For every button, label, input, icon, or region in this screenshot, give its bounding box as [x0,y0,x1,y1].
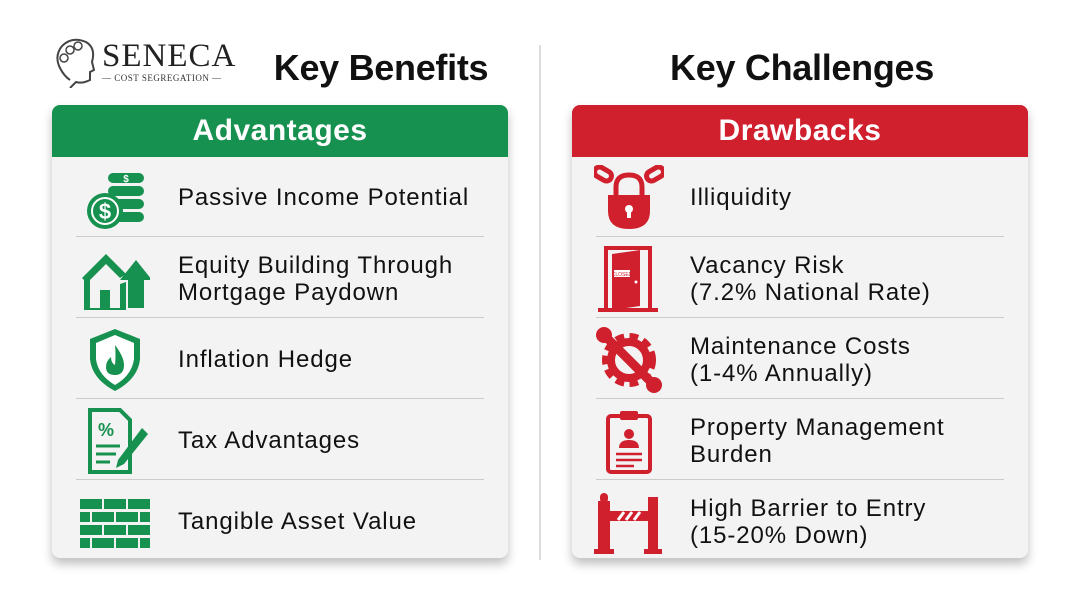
row: tax [88,408,360,474]
header: advantages: Advantages [192,114,368,147]
row: vacancy [598,246,931,312]
header: drawbacks: Drawbacks [719,114,881,147]
logo: — COST SEGREGATION — [102,73,222,83]
panel: advantages [52,105,508,558]
row: barrier [594,493,926,554]
row: illiquidity [594,165,792,229]
icon: house arrow [82,254,150,310]
icon: barrier gate [594,493,662,554]
row: management: Burden [690,440,773,468]
row: maintenance: (1-4% Annually) [690,360,873,386]
row: passive income [87,173,469,229]
row: inflation [90,329,353,391]
icon: gear wrench [596,327,662,393]
row: vacancy: (7.2% National Rate) [690,278,931,306]
row: management: Property Management [690,414,945,440]
row: equity [82,252,453,310]
icon: closed door [598,246,658,312]
icon: closed door: CLOSED [612,272,633,278]
row: equity: Mortgage Paydown [178,278,399,306]
row: vacancy: Vacancy Risk [690,252,844,278]
row: tax: Tax Advantages [178,427,360,454]
panel: drawbacks [572,105,1028,558]
logo [56,38,236,88]
row: tangible [80,499,417,548]
row: passive income: Passive Income Potential [178,184,469,211]
icon: bricks [80,499,150,548]
icon: shield flame [90,329,140,391]
icon: tax document [88,408,148,474]
row: maintenance [596,327,911,393]
row: management [606,411,945,474]
icon: padlock chain [594,165,664,229]
logo: SENECA [102,38,236,74]
header: drawbacks [572,105,1028,157]
row: barrier: (15-20% Down) [690,522,868,548]
title: key challenges: Key Challenges [670,47,934,88]
icon: coins: $ [99,199,111,224]
row: equity: Equity Building Through [178,252,453,278]
icon: coins: $ [123,174,129,185]
icon: coins [87,173,144,229]
row: inflation: Inflation Hedge [178,346,353,373]
title: key benefits: Key Benefits [274,47,488,88]
header: advantages [52,105,508,157]
row: tangible: Tangible Asset Value [178,508,417,535]
icon: clipboard [606,411,652,474]
icon: tax document: % [98,420,114,440]
row: maintenance: Maintenance Costs [690,332,911,360]
row: illiquidity: Illiquidity [690,184,792,211]
row: barrier: High Barrier to Entry [690,494,926,522]
